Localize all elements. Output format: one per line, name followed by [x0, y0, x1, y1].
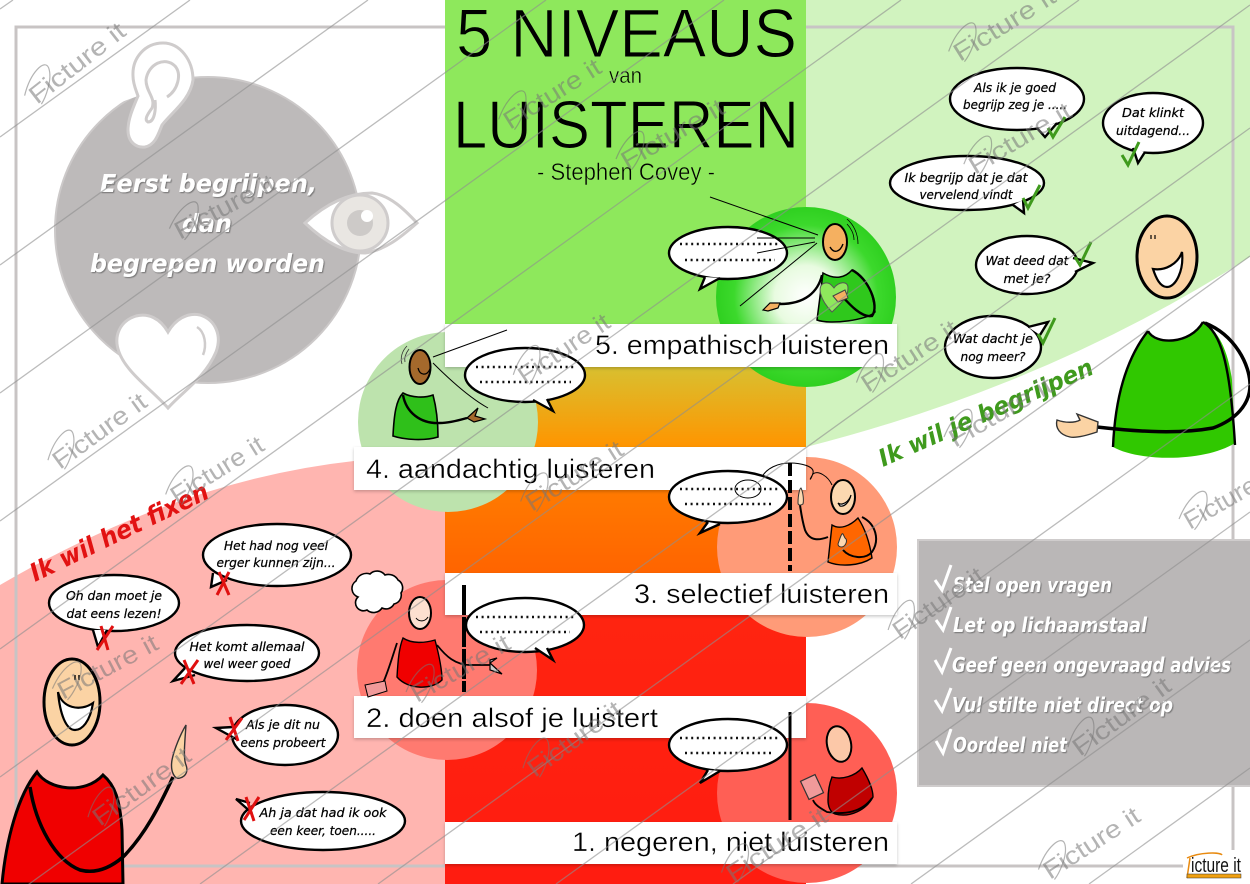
speech bubble: Het had nog veel: Het had nog veel [224, 539, 329, 553]
tip 2: Let op lichaamstaal [953, 613, 1148, 637]
speech bubble: Wat dacht je [945, 316, 1055, 378]
text: Ficture it [944, 371, 1058, 453]
label bar 5: 5. empathisch luisteren [595, 330, 889, 360]
label bar 1: 1. negeren, niet luisteren [572, 827, 889, 857]
text: Ficture it [23, 17, 131, 110]
title: LUISTEREN [453, 87, 799, 163]
speech bubble: Oh dan moet je: dat eens lezen! [66, 607, 162, 621]
text: Ficture it [856, 315, 964, 398]
text: Ficture it [87, 742, 197, 832]
label bar 2: 2. doen alsof je luistert [366, 703, 659, 733]
label bar 3 [445, 573, 897, 615]
motto text: Eerst begrijpen, [100, 169, 317, 198]
panel: grey motto circle [55, 43, 417, 408]
text: Ficture it [165, 431, 269, 510]
speech bubble: Dat klinkt: Dat klinkt [1122, 106, 1185, 120]
speech bubble: Oh dan moet je: Oh dan moet je [66, 589, 162, 603]
speech bubble: Het komt allemaal: Het komt allemaal [190, 640, 305, 654]
speech bubble: Wat deed dat: Wat deed dat [986, 254, 1070, 268]
tip 1: Stel open vragen [953, 573, 1112, 597]
figure: level 2 pretend listener [352, 571, 502, 697]
tip 4 [935, 688, 1173, 717]
central gradient column [445, 0, 806, 884]
level circle 5 [716, 207, 896, 387]
heading: Ik wil je begrijpen: Ik wil je begrijpen [874, 353, 1098, 472]
tip 1 [935, 565, 1112, 597]
speech bubble: Wat deed dat: met je? [1004, 272, 1051, 286]
background: pink fix-it zone [0, 461, 445, 884]
speech bubble: Wat dacht je: Wat dacht je [953, 332, 1033, 346]
text: Ficture it [522, 696, 628, 783]
speech bubble: Het komt allemaal: wel weer goed [204, 657, 291, 671]
title: - Stephen Covey - [537, 159, 715, 186]
speech bubble: Als je dit nu: Als je dit nu [245, 718, 320, 732]
text: Ficture it [513, 308, 615, 390]
icon: eye [305, 193, 417, 253]
figure: level 1 ignoring [790, 712, 873, 820]
level circle 1 [717, 703, 897, 883]
speech bubble: Ah ja dat had ik ook: een keer, toen..... [270, 824, 376, 838]
label bar 4 [354, 447, 806, 490]
tip 5: Oordeel niet [953, 733, 1068, 757]
speech bubble: Als je dit nu: eens probeert [240, 736, 327, 750]
speech bubble: Dat klinkt [1103, 93, 1203, 165]
text: Ficture it [53, 629, 163, 705]
speech bubble: Ah ja dat had ik ook [236, 792, 405, 850]
speech bubble: Het komt allemaal [173, 625, 319, 684]
tip 5 [936, 729, 1068, 757]
level circle 4 [358, 332, 538, 512]
text: Ficture it [1038, 802, 1146, 884]
speech bubble: Als je dit nu [216, 705, 338, 765]
label bar 3: 3. selectief luisteren [634, 579, 889, 609]
speech bubble: Ik begrijp dat je dat [890, 156, 1044, 213]
speech bubble: Ah ja dat had ik ook: Ah ja dat had ik ook [258, 806, 388, 820]
tip 4: Vul stilte niet direct op [952, 693, 1173, 717]
text: Ficture it [406, 629, 515, 708]
speech bubble: Wat dacht je: nog meer? [960, 350, 1026, 364]
speech bubble: Als ik je goed [950, 68, 1084, 137]
label bar 1 [445, 822, 897, 864]
text: Ficture it [47, 388, 153, 475]
icon: ear [128, 43, 193, 147]
icon: heart [117, 314, 218, 408]
speech bubble: Ik begrijp dat je dat: Ik begrijp dat je dat [904, 171, 1029, 185]
title [453, 0, 799, 186]
speech bubble: Ik begrijp dat je dat: vervelend vindt [920, 188, 1014, 202]
motto text [90, 169, 325, 278]
speech bubble: level 2 [466, 598, 584, 660]
figure: level 3 selective listener [760, 463, 876, 571]
logo: Ficture it [1183, 850, 1245, 882]
motto text: begrepen worden [90, 249, 325, 278]
speech bubble: Wat deed dat [976, 236, 1093, 294]
speech bubble: Oh dan moet je [49, 575, 179, 650]
text: Ficture it [616, 93, 730, 175]
text: Ficture it [170, 169, 280, 245]
panel: listening tips [918, 540, 1250, 786]
figure: smiling person in green [1057, 216, 1250, 458]
speech bubble: level 1 [669, 719, 787, 783]
level circle 3 [717, 457, 897, 637]
background: light green understanding zone [806, 0, 1250, 447]
figure: level 5 empathic listener [710, 197, 875, 322]
text: Ficture it [1067, 672, 1177, 762]
speech bubble: level 5 [669, 227, 815, 289]
motto text: dan [182, 209, 232, 238]
speech bubble: Het had nog veel [203, 524, 351, 595]
thought cloud [352, 571, 403, 613]
figure: level 4 attentive listener [393, 330, 507, 440]
speech bubble: Het had nog veel: erger kunnen zijn... [216, 556, 336, 570]
text: Ficture it [964, 97, 1077, 180]
speech bubble: Dat klinkt: uitdagend... [1116, 124, 1190, 138]
label bar 2 [354, 696, 806, 738]
speech bubble: Als ik je goed: Als ik je goed [973, 81, 1056, 95]
title: van [609, 63, 642, 88]
speech bubble: Als ik je goed: begrijp zeg je ..... [963, 98, 1067, 112]
text: Ficture it [498, 53, 607, 135]
figure: pointing person in red [2, 659, 187, 884]
speech bubble: level 3 [669, 471, 787, 533]
level circle 2 [357, 580, 537, 760]
label bar 5 [445, 324, 897, 367]
text: Ficture it [520, 435, 629, 517]
speech bubble: level 4 [465, 348, 585, 411]
tip 2 [936, 607, 1148, 637]
text: Ficture it [887, 562, 989, 645]
label bar 4: 4. aandachtig luisteren [366, 454, 655, 484]
heading: Ik wil het fixen: Ik wil het fixen [25, 477, 213, 587]
